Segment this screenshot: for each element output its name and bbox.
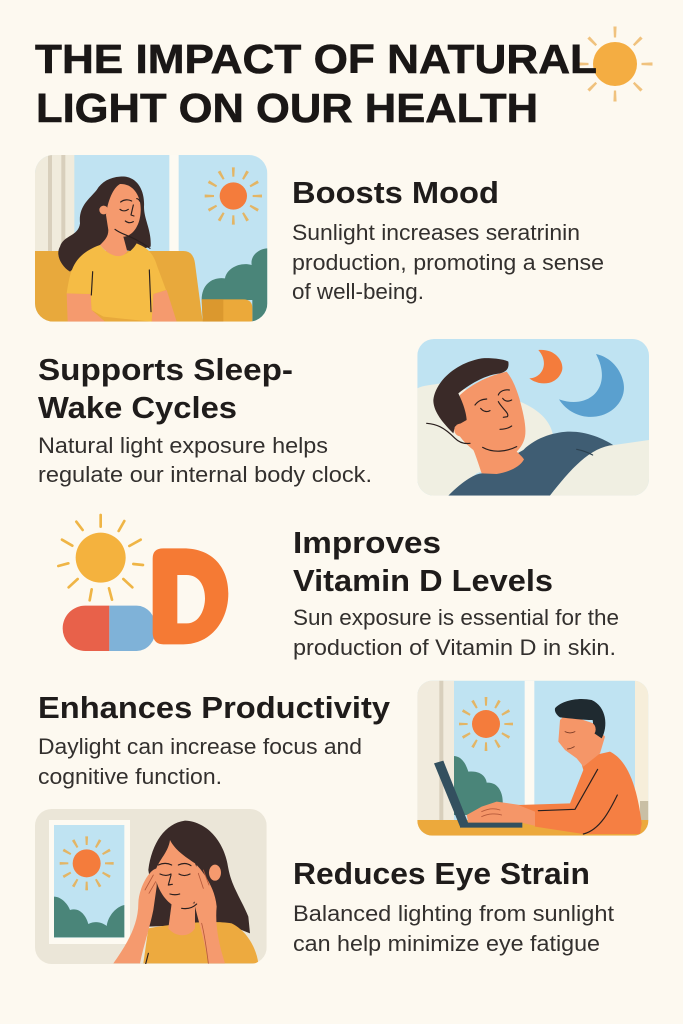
heading: enhances productivity: Enhances Productivity <box>38 690 391 725</box>
heading: boosts mood: Boosts Mood <box>292 175 499 210</box>
icon: letter D <box>153 548 228 644</box>
text: productivity description: Daylight can increase focus and <box>38 734 362 759</box>
title: LIGHT ON OUR HEALTH <box>36 85 538 131</box>
text: vitamin D description: production of Vitamin D in skin. <box>293 635 616 660</box>
panel: man at laptop illustration <box>417 681 648 836</box>
title <box>35 36 597 131</box>
text: productivity description: cognitive function. <box>38 764 222 789</box>
heading: improves vitamin D levels: Vitamin D Levels <box>293 563 553 598</box>
text: eye strain description <box>293 901 614 956</box>
heading: improves vitamin D levels: Improves <box>293 525 441 560</box>
icon: sun <box>58 515 143 600</box>
text: vitamin D description: Sun exposure is essential for the <box>293 605 619 630</box>
text: boosts mood description: production, promoting a sense <box>292 250 604 275</box>
text: vitamin D description <box>293 605 619 660</box>
heading: improves vitamin D levels <box>293 525 553 598</box>
heading: supports sleep-wake cycles <box>38 352 293 425</box>
title: THE IMPACT OF NATURAL <box>35 36 597 82</box>
heading: reduces eye strain: Reduces Eye Strain <box>293 856 590 891</box>
text: eye strain description: Balanced lighting from sunlight <box>293 901 614 926</box>
text: boosts mood description: Sunlight increases seratrinin <box>292 220 580 245</box>
panel: vitamin D icon <box>58 515 228 651</box>
heading: supports sleep-wake cycles: Wake Cycles <box>38 390 237 425</box>
panel: boosts mood illustration <box>35 155 267 322</box>
text: productivity description <box>38 734 362 789</box>
text: boosts mood description <box>292 220 604 304</box>
text: sleep description: regulate our internal body clock. <box>38 462 372 487</box>
panel: woman rubbing temples illustration <box>35 809 267 964</box>
text: boosts mood description: of well-being. <box>292 279 424 304</box>
text: sleep description: Natural light exposure helps <box>38 433 328 458</box>
icon: pill capsule <box>63 606 156 651</box>
icon: header sun <box>583 32 647 96</box>
heading: supports sleep-wake cycles: Supports Sleep- <box>38 352 293 387</box>
text: eye strain description: can help minimize eye fatigue <box>293 931 600 956</box>
panel: sleeping man illustration <box>417 339 649 496</box>
text: sleep description <box>38 433 372 487</box>
